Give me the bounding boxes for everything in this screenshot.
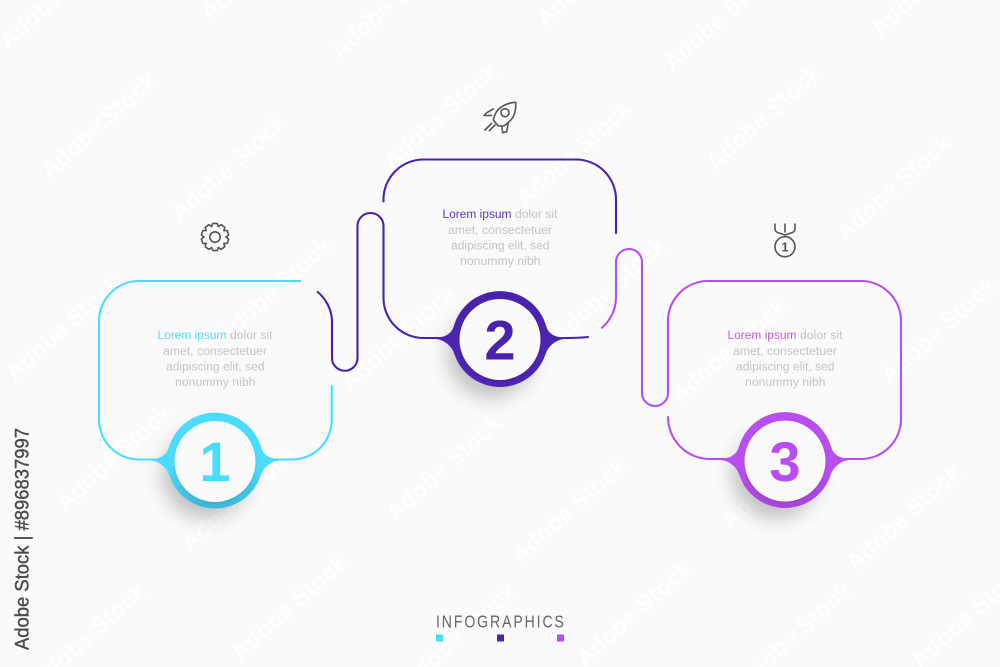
text block 3 xyxy=(728,330,843,389)
watermark pattern: Adobe Stock xyxy=(51,399,177,516)
panel 2: rocket step xyxy=(318,102,616,397)
text block 2 xyxy=(442,209,558,268)
text block 3: dolor sit xyxy=(800,330,843,342)
watermark pattern: Adobe Stock xyxy=(1,269,127,386)
text block 3: nonummy nibh xyxy=(745,377,826,389)
watermark pattern: Adobe Stock xyxy=(381,409,507,526)
icon: medal xyxy=(775,224,795,257)
number badge 3: 3 xyxy=(769,430,801,493)
text block 1: nonummy nibh xyxy=(175,377,256,389)
outline: box 2 and connector from box 1 xyxy=(318,160,616,371)
text block 1 xyxy=(158,330,273,389)
text block 2: Lorem ipsum xyxy=(442,209,512,221)
watermark pattern: Adobe Stock xyxy=(166,109,292,226)
number badge 3 xyxy=(718,412,852,518)
text block 1: amet, consectetuer xyxy=(163,346,267,358)
watermark pattern: Adobe Stock xyxy=(546,232,672,349)
watermark pattern: Adobe Stock xyxy=(506,452,632,569)
panel 1: gear step xyxy=(99,223,332,518)
watermark pattern: Adobe Stock xyxy=(511,95,637,212)
watermark pattern: Adobe Stock xyxy=(716,417,842,534)
text block 3: amet, consectetuer xyxy=(733,346,837,358)
text block 2: adipiscing elit, sed xyxy=(451,240,550,252)
icon: rocket xyxy=(484,102,516,133)
icon: gear xyxy=(201,223,229,251)
watermark pattern: Adobe Stock xyxy=(666,292,792,409)
footer title: INFOGRAPHICS xyxy=(436,612,564,632)
watermark pattern: Adobe Stock xyxy=(876,272,1000,389)
watermark pattern: Adobe Stock xyxy=(211,232,337,349)
text block 1: dolor sit xyxy=(230,330,273,342)
outline: box 3 and connector from box 2 xyxy=(602,249,901,459)
watermark pattern: Adobe Stock xyxy=(701,59,827,176)
watermark pattern: Adobe Stock xyxy=(226,549,352,666)
watermark pattern: Adobe Stock xyxy=(378,57,504,174)
watermark pattern: Adobe Stock xyxy=(841,459,967,576)
icon: medal: 1 xyxy=(781,240,789,254)
number badge 1: 1 xyxy=(199,430,231,493)
number badge 2 xyxy=(434,291,566,397)
text block 2: nonummy nibh xyxy=(460,256,540,268)
text block 1: Lorem ipsum xyxy=(158,330,226,342)
watermark pattern: Adobe Stock xyxy=(176,439,302,556)
text block 2: amet, consectetuer xyxy=(448,225,552,237)
panel 3: medal step xyxy=(602,224,901,518)
text block 2: dolor sit xyxy=(515,209,558,221)
text block 1: adipiscing elit, sed xyxy=(166,362,264,374)
outline: box 1 xyxy=(99,281,332,460)
stock id label: Adobe Stock | #896837997 xyxy=(12,428,34,650)
watermark pattern: Adobe Stock xyxy=(336,279,462,396)
text block 3: adipiscing elit, sed xyxy=(736,362,834,374)
text block 3: Lorem ipsum xyxy=(728,330,796,342)
watermark pattern: Adobe Stock xyxy=(831,129,957,246)
watermark pattern: Adobe Stock xyxy=(36,67,162,184)
number badge 1 xyxy=(148,413,282,518)
number badge 2: 2 xyxy=(484,308,516,372)
legend squares xyxy=(436,634,564,642)
